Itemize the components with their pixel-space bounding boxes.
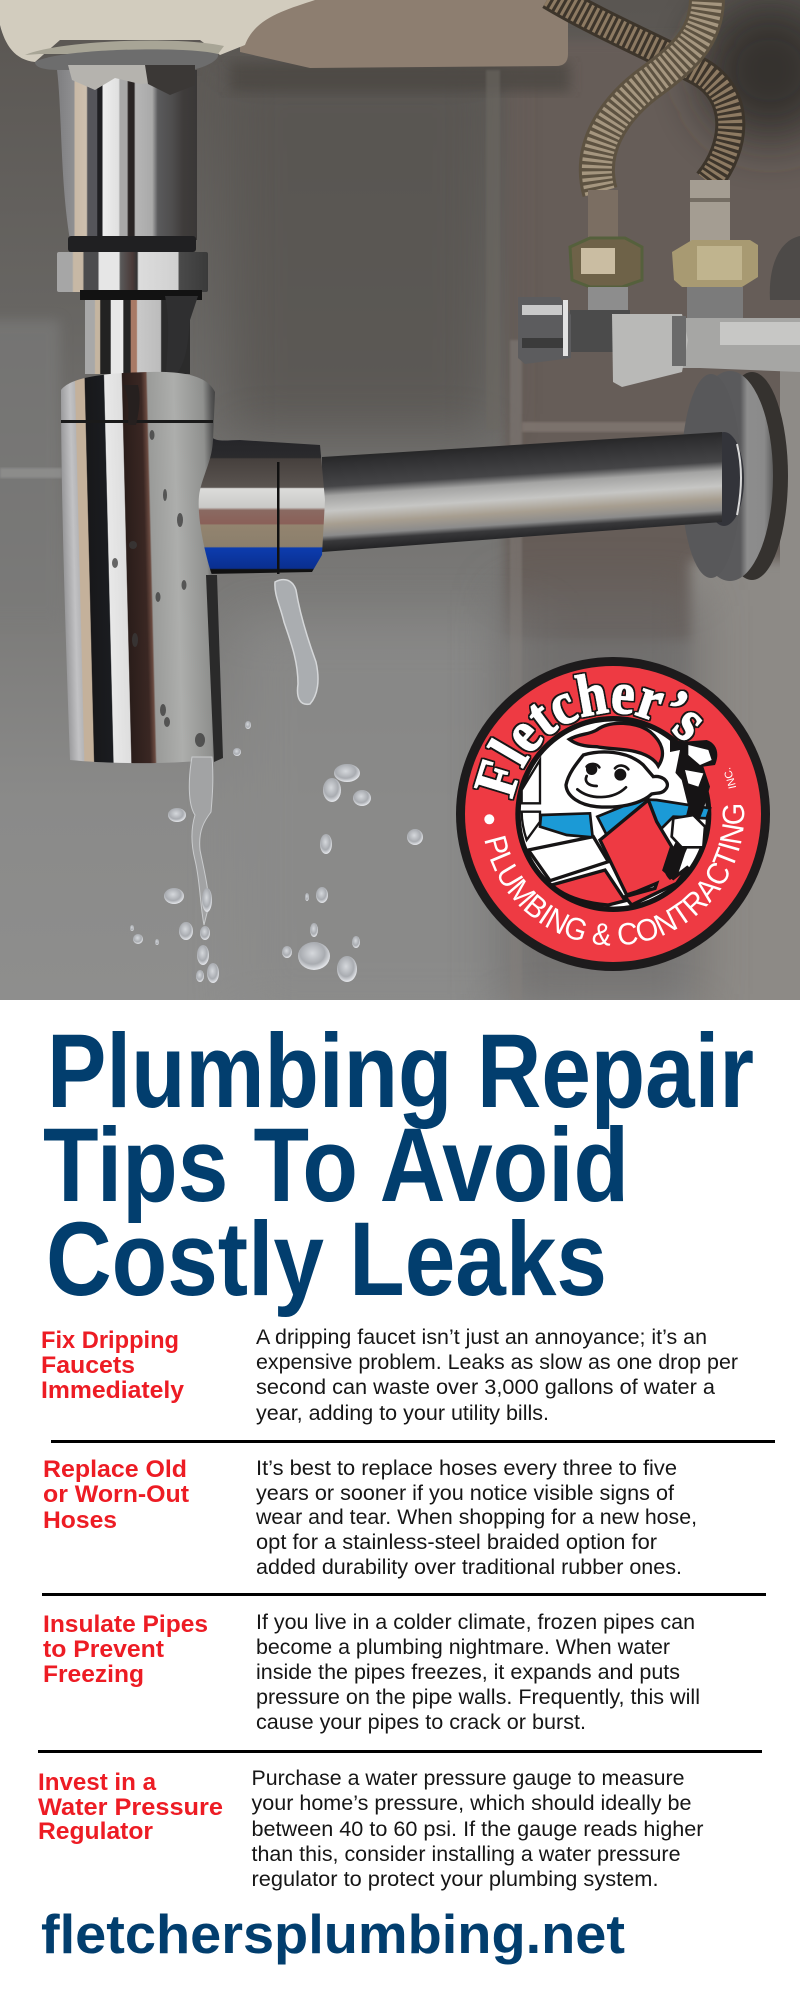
front hose [597,0,707,192]
tip 3 body: cause your pipes to crack or burst. [256,1711,586,1734]
overalls [600,800,688,905]
tip 1 heading [41,1327,185,1404]
INC. label: INC. [724,768,736,788]
title: Costly Leaks [46,1201,607,1318]
dark ring below nut [80,290,202,300]
wall background [0,0,800,1020]
braided supply hoses [550,0,730,192]
title: Tips To Avoid [43,1107,629,1224]
tip 1: dripping faucets [41,1326,738,1425]
tip 3 heading: Insulate Pipes [43,1611,208,1638]
tip 4 body: than this, consider installing a water pressure [252,1843,680,1866]
tip 4 heading: Invest in a [38,1769,157,1796]
badge red disc [465,666,761,962]
tip 4 body: between 40 to 60 psi. If the gauge reads higher [252,1818,704,1841]
water stream from joint [275,580,318,704]
badge black outer ring [456,657,770,971]
white dot [484,814,494,824]
side outlet arm [198,438,325,574]
photo: leaking chrome pipe under sink [0,0,800,1020]
drain flange [35,49,218,70]
sink underside [0,0,568,68]
blue shirt [540,799,710,837]
tip 2 body: added durability over traditional rubber ones. [256,1556,682,1579]
brand name on arc: Fletcher’s [472,672,704,801]
tip 3 heading: to Prevent [43,1636,164,1663]
tip 2 heading: Replace Old [43,1456,187,1483]
eyes and smile [577,764,628,797]
tip 1 heading: Fix Dripping [41,1327,179,1354]
tip 4 body: regulator to protect your plumbing system. [252,1868,658,1891]
top chrome tube [57,65,197,240]
drip on neck [165,296,198,320]
tip 4: pressure regulator [38,1767,704,1891]
wall flange [681,371,788,581]
tip 1 body: A dripping faucet isn’t just an annoyance; it’s an [256,1326,707,1349]
tip 4 body: Purchase a water pressure gauge to measure [252,1767,684,1790]
company descriptor on arc: PLUMBING & CONTRACTING [484,805,744,946]
tip 1 body [256,1326,738,1425]
chrome neck [85,300,190,374]
title [43,1013,754,1318]
shutoff valves [518,236,800,387]
tip 3: insulate pipes [43,1611,700,1734]
tip 2 body: wear and tear. When shopping for a new hose, [255,1506,697,1529]
water stream from base [189,757,213,925]
tip 3 heading: Freezing [43,1661,144,1688]
tip 2 body [255,1457,697,1579]
tip 1 heading: Faucets [41,1352,135,1379]
tip 3 body: pressure on the pipe walls. Frequently, this will [256,1686,700,1709]
rear hose [550,0,730,182]
horizontal chrome pipe [322,432,722,552]
chrome ring [68,236,196,252]
hand [672,815,705,847]
tip 2 heading: or Worn-Out [43,1481,189,1508]
tip 3 body: If you live in a colder climate, frozen pipes can [256,1611,695,1634]
lower white leg [528,837,608,881]
tip 4 heading [38,1769,223,1845]
face [566,752,667,807]
tip 3 body: become a plumbing nightmare. When water [256,1636,670,1659]
logo: Fletcher's Plumbing & Contracting badge [456,657,770,971]
chrome nut [57,252,208,292]
red cap [569,723,662,766]
main trap body [61,372,223,763]
tip 2 body: years or sooner if you notice visible signs of [256,1482,674,1505]
tip 3 body: inside the pipes freezes, it expands and puts [256,1661,680,1684]
lower red trousers [552,870,625,905]
tip 4 heading: Regulator [38,1818,153,1845]
tip 1 body: second can waste over 3,000 gallons of water a [256,1376,715,1399]
tip 4 body: your home’s pressure, which should ideally be [252,1792,692,1815]
tip 1 body: year, adding to your utility bills. [256,1402,549,1425]
mascot plumber with wrench [515,716,717,912]
tip 4 body [252,1767,704,1891]
footer website: fletchersplumbing.net [41,1903,625,1965]
tip 3 body [256,1611,700,1734]
tip 2 body: It’s best to replace hoses every three to five [256,1457,677,1480]
hose ferrules [588,180,730,242]
wrench [664,740,717,880]
tip 2: replace hoses [43,1456,697,1579]
brass nuts [570,238,758,287]
water droplets [130,721,423,983]
tip 2 heading [43,1456,189,1534]
tip 1 body: expensive problem. Leaks as slow as one drop per [256,1351,738,1374]
tip 1 heading: Immediately [41,1377,185,1404]
tip 2 heading: Hoses [43,1507,117,1534]
tip 2 body: opt for a stainless-steel braided option for [256,1531,657,1554]
tip 3 heading [43,1611,208,1688]
tip 4 heading: Water Pressure [38,1794,223,1821]
